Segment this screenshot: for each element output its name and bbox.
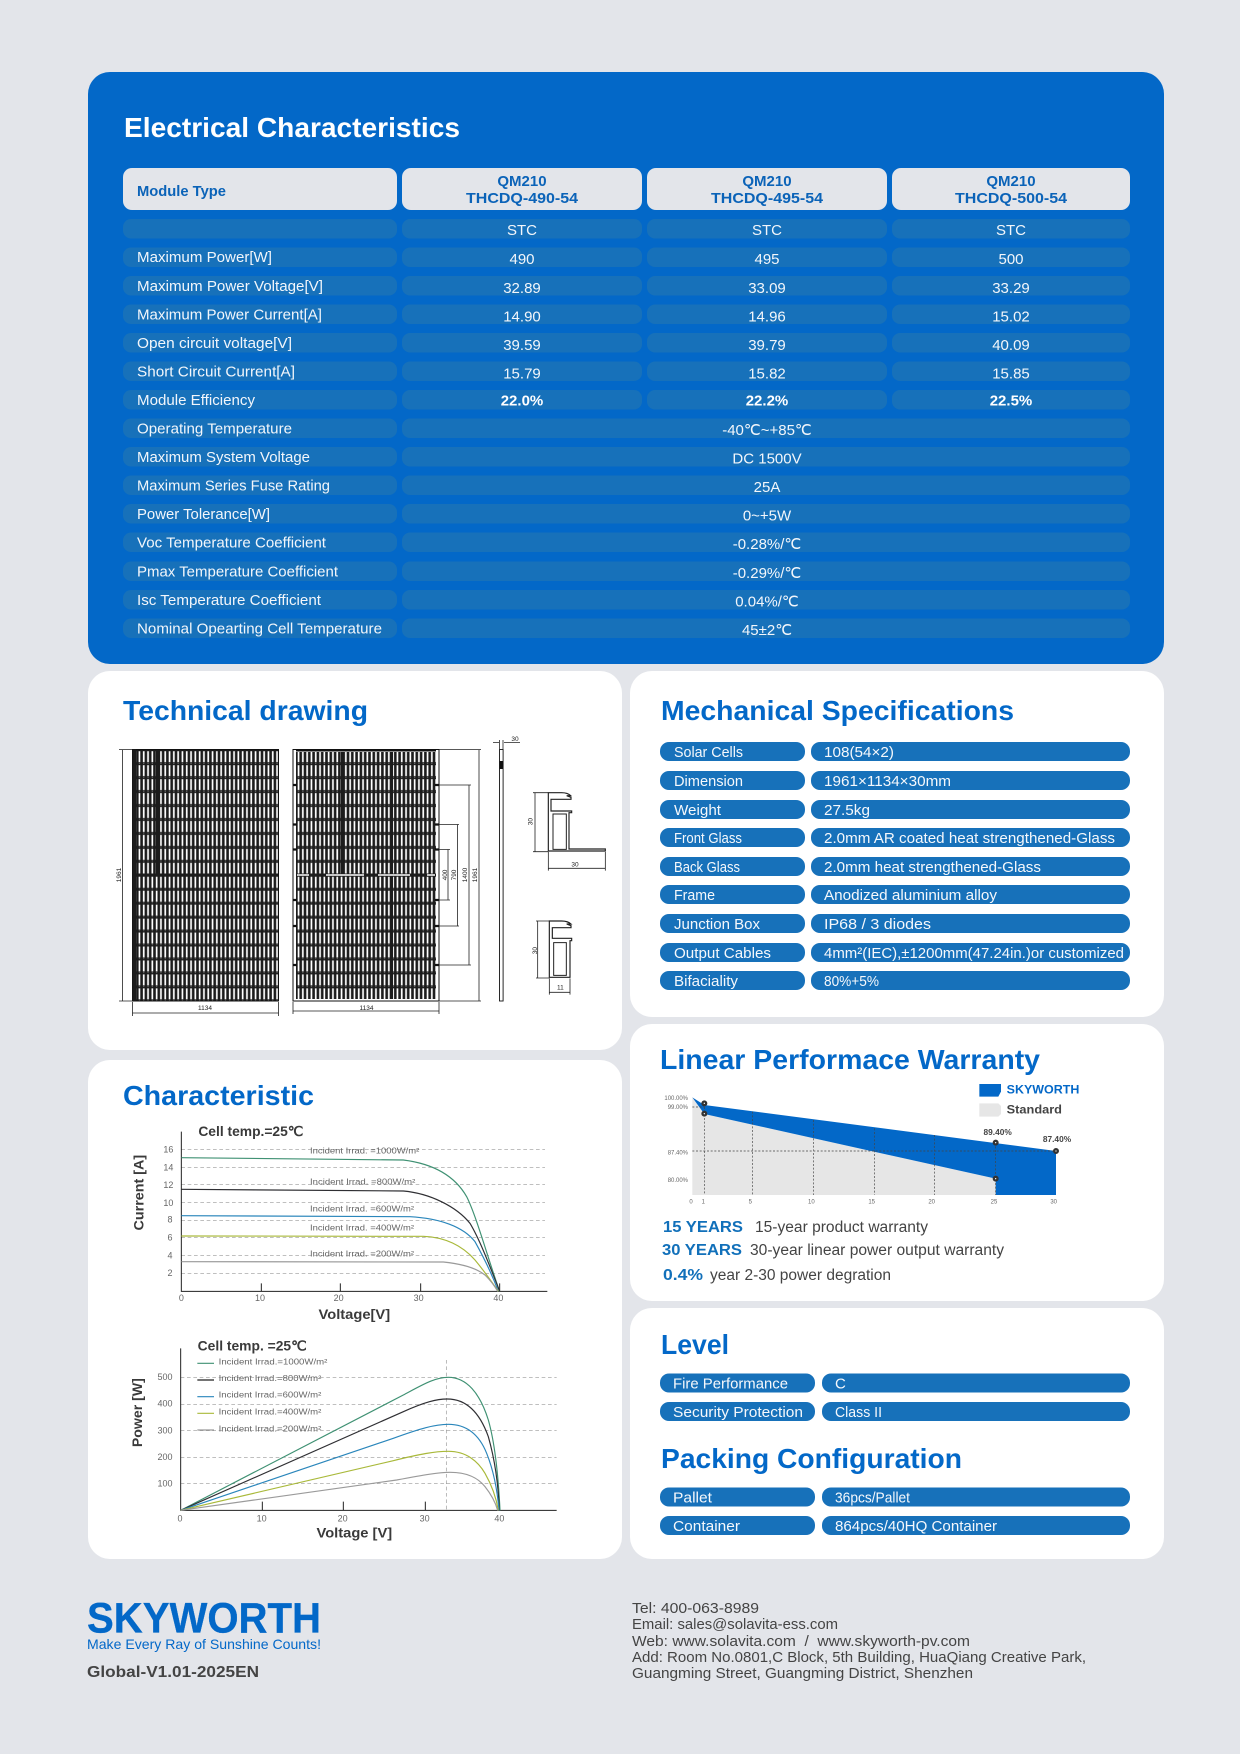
table header row [123,168,1130,210]
drawing: frame cross-section short side: 11 [557,985,564,992]
spec: front glass: 2.0mm AR coated heat strengthened-Glass [824,830,1115,847]
spec: solar cells [660,742,1130,761]
row: test condition [123,219,1130,239]
heading: characteristic: Characteristic [123,1080,314,1111]
chart: warranty curve: 1 [702,1200,706,1206]
chart: power vs voltage: Power [W] [129,1378,145,1447]
footer: contact details: Guangming Street, Guangming District, Shenzhen [632,1666,973,1682]
spec: frame [660,885,1130,904]
spec: bifaciality [660,971,1130,990]
footer: contact details: Tel: 400-063-8989 [632,1601,759,1617]
spec: security protection: Class II [835,1404,882,1421]
chart: warranty curve: 30 [1050,1200,1058,1206]
spec: weight: 27.5kg [824,802,870,819]
spec: front glass: Front Glass [674,830,742,847]
row: maximum system voltage [123,447,1130,468]
footer: brand block [87,1594,321,1681]
row: nominal operating cell temperature: 45±2℃ [742,622,792,639]
row: short circuit current [123,362,1130,382]
chart: warranty curve: 25 [991,1200,998,1206]
tagline: Make Every Ray of Sunshine Counts! [87,1636,321,1652]
chart: current vs voltage: 14 [163,1163,173,1173]
spec: output cables [660,943,1130,962]
chart: current vs voltage: 12 [163,1180,173,1190]
table header row: QM210 [742,173,792,190]
drawing: rear view of module [293,750,481,1014]
row: voc temperature coefficient [123,532,1130,553]
spec: junction box: IP68 / 3 diodes [824,916,931,933]
table header row: THCDQ-490-54 [466,190,579,207]
chart: current vs voltage: Incident Irrad. =800W/m² [310,1178,416,1187]
row: maximum power current [123,304,1130,326]
chart: current vs voltage: 8 [167,1215,172,1225]
chart: warranty curve: 99.00% [668,1105,689,1111]
row: power tolerance: Power Tolerance[W] [137,506,270,523]
chart: current vs voltage: Incident Irrad. =200W/m² [310,1249,414,1258]
row: maximum power: 495 [754,251,780,268]
row: maximum power voltage [123,276,1130,297]
spec: back glass: Back Glass [674,859,740,876]
row: maximum power current: 14.96 [748,308,786,326]
row: voc temperature coefficient: Voc Temperature Coefficient [137,534,327,552]
chart: current vs voltage: Incident Irrad. =400W/m² [310,1223,414,1232]
row: test condition: STC [507,222,537,239]
row: module efficiency: 22.5% [990,392,1032,410]
table header row: Module Type [137,183,226,200]
chart: warranty curve: 89.40% [984,1127,1012,1137]
spec: frame: Frame [674,887,715,904]
row: operating temperature: -40℃~+85℃ [722,422,812,439]
row: maximum system voltage: DC 1500V [732,450,802,468]
chart: power vs voltage: Incident Irrad.=1000W/m² [219,1357,328,1366]
spec: pallet: 36pcs/Pallet [835,1490,911,1506]
chart: current vs voltage: 10 [163,1198,173,1208]
row: nominal operating cell temperature: Nominal Opearting Cell Temperature [137,620,382,638]
chart: warranty curve: 80.00% [668,1178,689,1184]
chart: power vs voltage: 100 [157,1478,172,1488]
chart: power vs voltage: 30 [420,1513,430,1523]
chart: current vs voltage: 30 [414,1293,424,1303]
chart: warranty curve: 5 [749,1200,753,1206]
chart: power vs voltage: 500 [157,1372,172,1382]
row: module efficiency: 22.0% [501,392,543,410]
heading: packing configuration: Packing Configuration [661,1443,962,1474]
row: test condition: STC [752,222,782,239]
row: operating temperature: Operating Temperature [137,420,292,438]
chart: power vs voltage: Voltage [V] [316,1525,392,1541]
spec: junction box: Junction Box [674,916,760,933]
chart: warranty curve: 20 [928,1200,936,1206]
row: maximum power current: 15.02 [992,308,1030,326]
row: maximum power voltage: 33.29 [992,280,1030,297]
row: short circuit current: 15.82 [748,366,786,382]
chart: warranty curve: 100.00% [664,1096,689,1102]
chart: power vs voltage: Incident Irrad.=400W/m² [219,1407,322,1416]
warranty: 15 years: 15-year product warranty [755,1219,928,1236]
row: module efficiency [123,390,1130,410]
drawing: rear view of module: 1961 [472,867,479,882]
footer: contact details: Add: Room No.0801,C Block, 5th Building, HuaQiang Creative Park, [632,1650,1086,1666]
chart: power vs voltage [129,1338,557,1541]
spec: solar cells: 108(54×2) [824,744,894,761]
footer: contact details: Web: www.solavita.com / www.skyworth-pv.com [632,1634,970,1650]
chart: current vs voltage: 16 [163,1145,173,1155]
footer: contact details [632,1601,1086,1682]
row: pmax temperature coefficient: Pmax Temperature Coefficient [137,564,339,580]
chart: warranty curve: 10 [808,1200,815,1206]
row: open circuit voltage: 39.59 [503,337,541,354]
row: maximum power voltage: Maximum Power Voltage[V] [137,278,323,295]
warranty: 30 years: 30 YEARS [662,1242,742,1259]
spec: security protection: Security Protection [673,1404,803,1421]
chart: warranty curve: 0 [689,1200,693,1206]
chart: power vs voltage: Incident Irrad.=800W/m² [219,1374,322,1383]
chart: warranty curve: 15 [868,1200,876,1206]
spec: fire performance [660,1374,1130,1392]
heading: electrical characteristics: Electrical Characteristics [124,112,460,143]
row: maximum system voltage: Maximum System Voltage [137,449,310,466]
heading: linear performance warranty: Linear Performace Warranty [660,1044,1040,1075]
table header row: THCDQ-495-54 [711,190,824,207]
row: open circuit voltage: 39.79 [748,337,786,354]
chart: power vs voltage: Incident Irrad.=600W/m² [219,1391,322,1400]
warranty: 15 years [663,1219,928,1236]
spec: fire performance: C [835,1376,846,1392]
spec: weight [660,800,1130,819]
chart: current vs voltage: 20 [334,1293,344,1303]
drawing: rear view of module: 1400 [462,867,469,882]
chart: current vs voltage [130,1123,547,1322]
spec: frame: Anodized aluminium alloy [824,887,998,904]
chart: warranty curve: 87.40% [1043,1134,1072,1144]
row: isc temperature coefficient: 0.04%/℃ [735,594,799,610]
panel: technical drawing [88,671,622,1050]
warranty: 15 years: 15 YEARS [663,1219,743,1236]
panel: electrical characteristics [88,72,1164,664]
drawing: frame cross-section short side [532,921,572,995]
spec: junction box [660,914,1130,933]
drawing: side view of module: 30 [511,736,519,743]
chart: current vs voltage: 10 [255,1293,265,1303]
row: pmax temperature coefficient [123,562,1130,582]
footer: contact details: Email: sales@solavita-ess.com [632,1617,838,1633]
spec: dimension: 1961×1134×30mm [824,773,951,790]
row: maximum power voltage: 33.09 [748,280,786,297]
chart: power vs voltage: 300 [157,1425,172,1435]
chart: power vs voltage: Incident Irrad.=200W/m² [219,1424,322,1433]
chart: current vs voltage: 40 [493,1293,503,1303]
table header row: THCDQ-500-54 [955,190,1068,207]
chart: power vs voltage: Cell temp. =25℃ [198,1338,307,1354]
row: isc temperature coefficient [123,590,1130,610]
chart: warranty curve: SKYWORTH [1007,1082,1079,1096]
row: maximum power [123,248,1130,268]
chart: current vs voltage: 0 [179,1293,184,1303]
chart: current vs voltage: Incident Irrad. =1000W/m² [310,1146,420,1155]
chart: power vs voltage: 20 [338,1513,348,1523]
drawing: frame cross-section long side: 30 [528,818,535,825]
drawing: frame cross-section long side: 30 [571,861,579,868]
drawing: rear view of module: 790 [451,869,458,880]
row: module efficiency: Module Efficiency [137,392,255,409]
chart: warranty curve: 87.40% [668,1150,689,1156]
spec: solar cells: Solar Cells [674,744,743,761]
row: maximum power: Maximum Power[W] [137,249,272,266]
row: open circuit voltage: 40.09 [992,337,1030,354]
chart: current vs voltage: Current [A] [130,1155,146,1230]
row: maximum power voltage: 32.89 [503,280,541,297]
spec: fire performance: Fire Performance [673,1376,788,1392]
table header row: QM210 [497,173,547,190]
drawing: frame cross-section short side: 30 [532,947,539,954]
spec: bifaciality: 80%+5% [824,973,879,990]
row: maximum power: 490 [509,251,535,268]
panel: linear performance warranty [630,1024,1164,1301]
spec: back glass [660,857,1130,876]
drawing: rear view of module: 1134 [360,1005,374,1012]
chart: warranty curve: Standard [1007,1102,1062,1116]
row: maximum series fuse rating: 25A [754,479,780,496]
warranty: power degradation: 0.4% [663,1267,703,1284]
spec: output cables: 4mm²(IEC),±1200mm(47.24in.)or customized [824,945,1124,962]
chart: power vs voltage: 40 [494,1513,504,1523]
drawing: side view of module [493,736,520,1001]
table header row: QM210 [986,173,1036,190]
panel: characteristic [88,1060,622,1559]
row: maximum power current: Maximum Power Current[A] [137,306,322,324]
spec: front glass [660,828,1130,847]
row: short circuit current: Short Circuit Current[A] [137,364,295,380]
heading: mechanical specifications: Mechanical Specifications [661,695,1014,726]
row: test condition: STC [996,222,1026,239]
chart: power vs voltage: 400 [157,1398,172,1408]
spec: container: 864pcs/40HQ Container [835,1518,997,1535]
warranty: 30 years: 30-year linear power output warranty [750,1242,1004,1259]
warranty: power degradation: year 2-30 power degration [710,1267,891,1284]
chart: power vs voltage: 10 [257,1513,267,1523]
row: maximum power current: 14.90 [503,308,541,326]
drawing: frame cross-section long side [528,793,605,871]
spec: pallet [660,1488,1130,1506]
spec: container [660,1516,1130,1535]
row: voc temperature coefficient: -0.28%/℃ [733,536,801,553]
row: power tolerance [123,504,1130,524]
chart: current vs voltage: Voltage[V] [318,1306,390,1322]
row: isc temperature coefficient: Isc Temperature Coefficient [137,592,322,609]
spec: dimension: Dimension [674,773,743,790]
spec: dimension [660,771,1130,790]
panel: level and packing configuration [630,1308,1164,1559]
heading: technical drawing: Technical drawing [123,695,368,726]
chart: current vs voltage: Cell temp.=25℃ [198,1123,304,1139]
spec: back glass: 2.0mm heat strengthened-Glass [824,859,1041,876]
row: maximum power: 500 [998,251,1024,268]
spec: bifaciality: Bifaciality [674,973,739,990]
spec: pallet: Pallet [673,1490,713,1506]
row: nominal operating cell temperature [123,618,1130,639]
row: maximum series fuse rating [123,476,1130,496]
row: power tolerance: 0~+5W [743,508,792,524]
row: module efficiency: 22.2% [746,392,788,410]
chart: current vs voltage: Incident Irrad. =600W/m² [310,1204,414,1213]
spec: security protection [660,1402,1130,1421]
chart: warranty curve [664,1082,1079,1206]
row: pmax temperature coefficient: -0.29%/℃ [733,565,801,582]
drawing: front view of module [116,750,278,1016]
version code: Global-V1.01-2025EN [87,1664,259,1681]
drawing: front view of module: 1134 [198,1005,212,1012]
row: open circuit voltage [123,333,1130,354]
row: open circuit voltage: Open circuit voltage[V] [137,335,292,352]
chart: current vs voltage: 6 [167,1233,172,1243]
chart: power vs voltage: 0 [177,1513,182,1523]
row: short circuit current: 15.79 [503,366,541,382]
chart: current vs voltage: 4 [167,1251,172,1261]
spec: output cables: Output Cables [674,945,771,962]
row: maximum series fuse rating: Maximum Series Fuse Rating [137,478,330,494]
logo wordmark: SKYWORTH [87,1594,321,1642]
heading: level: Level [661,1329,729,1360]
spec: weight: Weight [674,802,722,819]
row: short circuit current: 15.85 [992,366,1030,382]
panel: mechanical specifications [630,671,1164,1017]
spec: container: Container [673,1518,740,1535]
drawing: rear view of module: 400 [442,869,449,880]
drawing: front view of module: 1961 [116,867,123,882]
row: operating temperature [123,418,1130,439]
chart: power vs voltage: 200 [157,1452,172,1462]
chart: current vs voltage: 2 [167,1268,172,1278]
